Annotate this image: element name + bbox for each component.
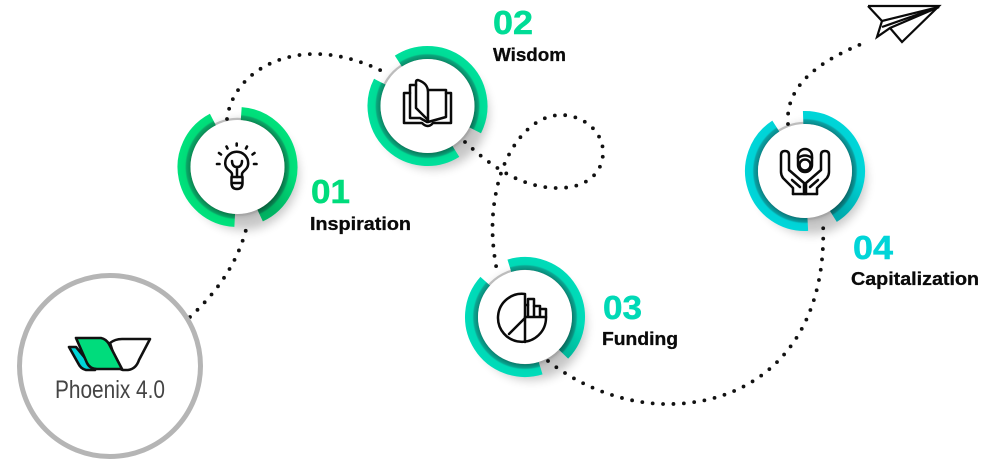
label Wisdom: Wisdom <box>493 44 566 65</box>
icon: Phoenix logo <box>69 338 150 370</box>
logo wordmark: Phoenix 4.0 <box>55 376 165 404</box>
logo circle: Phoenix 4.0 <box>20 276 200 456</box>
label Inspiration: Inspiration <box>310 213 411 234</box>
icon: pie and bar chart <box>498 294 546 342</box>
label Capitalization: Capitalization <box>851 268 979 289</box>
ring 04 <box>751 117 866 234</box>
label Funding: Funding <box>602 328 678 349</box>
dotted route: step 04 to paper plane <box>788 41 869 124</box>
icon: paper plane <box>868 6 939 42</box>
dotted route: step 02 loop to step 03 <box>465 115 603 271</box>
number 04: 04 <box>853 229 894 266</box>
step 02: Wisdom <box>374 4 566 169</box>
icon: open book <box>404 80 451 126</box>
ring 03 <box>471 264 586 380</box>
step 01: Inspiration <box>184 114 411 234</box>
ring 02 <box>374 52 488 169</box>
dotted route: step 03 to step 04 <box>548 222 823 404</box>
ring 01 <box>184 114 298 230</box>
dotted route: step 01 to step 02 <box>227 54 388 119</box>
step 03: Funding <box>471 264 678 380</box>
number 01: 01 <box>311 173 350 210</box>
dotted route: logo to step 01 <box>190 221 248 317</box>
number 02: 02 <box>493 4 533 41</box>
icon: light bulb <box>217 144 256 189</box>
step 04: Capitalization <box>751 117 979 289</box>
icon: hands holding coins <box>781 149 829 194</box>
number 03: 03 <box>603 289 642 326</box>
